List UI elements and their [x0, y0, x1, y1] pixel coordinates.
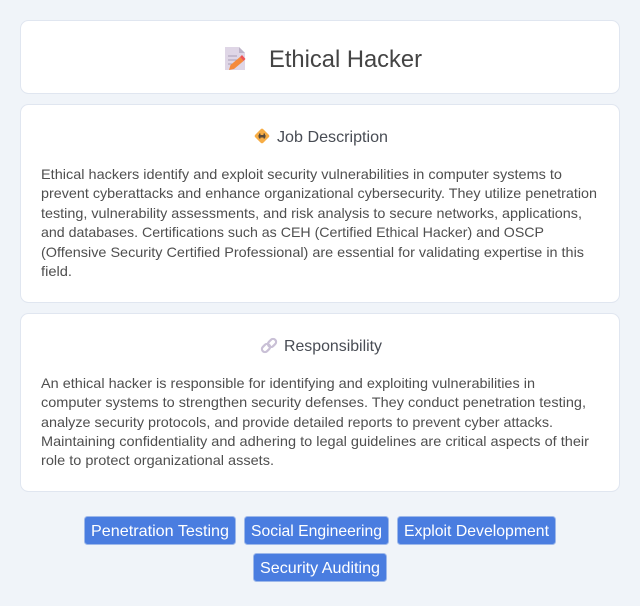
- title: Ethical Hacker: [269, 46, 422, 73]
- tag: security auditing: Security Auditing: [260, 560, 380, 577]
- responsibility text: Maintaining confidentiality and adhering to legal guidelines are critical aspects of their: [41, 433, 589, 449]
- responsibility text: role to protect organizational assets.: [41, 452, 274, 468]
- responsibility text: An ethical hacker is responsible for identifying and exploiting vulnerabilities in: [41, 375, 535, 391]
- heading: responsibility: Responsibility: [284, 338, 382, 355]
- job description text: (Offensive Security Certified Professional) are essential for validating expertise in this: [41, 244, 584, 260]
- tag: penetration testing: [84, 516, 236, 544]
- tag: exploit development: [398, 516, 556, 544]
- job description text: and databases. Certifications such as CEH (Certified Ethical Hacker) and OSCP: [41, 224, 544, 240]
- job description text: testing, vulnerability assessments, and risk analysis to secure networks, applications,: [41, 205, 582, 221]
- icon: document with pencil: [225, 47, 246, 70]
- job description text: Ethical hackers identify and exploit security vulnerabilities in computer systems to: [41, 166, 562, 182]
- tag: exploit development: Exploit Development: [404, 523, 550, 540]
- tag: social engineering: [244, 516, 388, 544]
- job description text: prevent cyberattacks and enhance organizational cybersecurity. They utilize penetration: [41, 185, 597, 201]
- responsibility text: [41, 375, 589, 468]
- tag: security auditing: [254, 554, 386, 582]
- job description text: field.: [41, 263, 72, 279]
- panel: title card: [20, 20, 620, 94]
- responsibility text: computer systems to strengthen security defenses. They conduct penetration testing,: [41, 394, 586, 410]
- tag: penetration testing: Penetration Testing: [91, 523, 229, 540]
- tag: social engineering: Social Engineering: [251, 523, 382, 540]
- job description text: [41, 166, 597, 279]
- icon: chain link: [261, 338, 277, 353]
- heading: job description: Job Description: [277, 129, 388, 146]
- panel: job description: [20, 104, 620, 302]
- icon: construction diamond: [254, 128, 270, 144]
- responsibility text: analyze security protocols, and provide detailed reports to prevent cyber attacks.: [41, 414, 553, 430]
- panel: responsibility: [20, 314, 620, 492]
